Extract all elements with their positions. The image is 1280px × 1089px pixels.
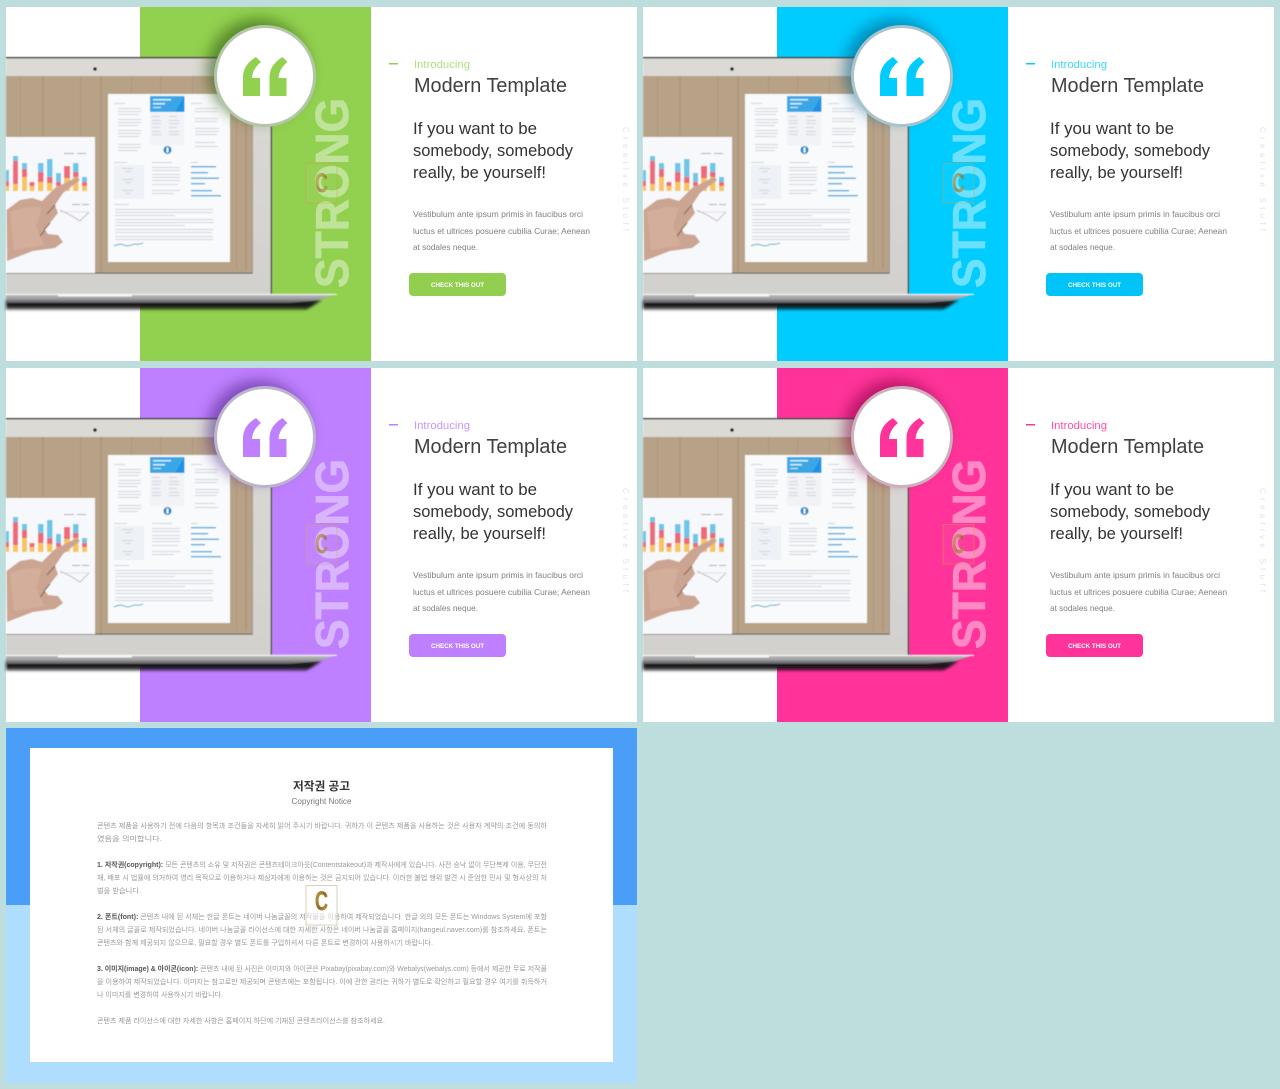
- body text: Vestibulum ante ipsum primis in faucibus orci: [1050, 570, 1220, 580]
- laptop with photo of resume and chart: [6, 57, 337, 310]
- vertical caption: Creative Stuff: [1258, 488, 1267, 593]
- watermark C: C: [315, 886, 328, 916]
- vertical word STRONG: STRONG: [943, 459, 995, 649]
- vertical word STRONG: STRONG: [306, 459, 358, 649]
- quote text: somebody, somebody: [413, 141, 573, 160]
- quote text: [1050, 119, 1210, 182]
- clause 2 font: [97, 912, 548, 947]
- vertical word STRONG: STRONG: [943, 98, 995, 288]
- quote badge: [216, 26, 314, 126]
- heading: Modern Template: [414, 436, 567, 458]
- clause 3 image and icon: [97, 964, 548, 999]
- notice subtitle: Copyright Notice: [292, 796, 352, 806]
- heading: Modern Template: [1051, 436, 1204, 458]
- accent dash: [389, 63, 398, 64]
- accent dash: [1026, 63, 1035, 64]
- quote text: really, be yourself!: [413, 524, 546, 543]
- eyebrow: Introducing: [1051, 420, 1107, 432]
- body text: [413, 209, 590, 252]
- eyebrow: Introducing: [1051, 59, 1107, 71]
- body text: [1050, 570, 1227, 613]
- button: [1046, 273, 1143, 296]
- body text: luctus et ultrices posuere cubilia Curae; Aenean: [413, 226, 590, 236]
- white notice card: [30, 748, 613, 1062]
- pink colour band: [777, 368, 1008, 722]
- quote text: really, be yourself!: [1050, 524, 1183, 543]
- clause 3 image and icon: 3. 이미지(image) & 아이콘(icon): 콘텐츠 내에 된 사진은 이미지와 아이콘은 Pixabay(pixabay.com)와 Webalys(webalys.com) 등에서 제공한 무료 저작물: [97, 964, 548, 973]
- intro paragraph: [97, 821, 548, 843]
- watermark C: C: [952, 168, 965, 198]
- upper blue band: [6, 728, 637, 905]
- accent dash: [389, 424, 398, 426]
- vertical caption: Creative Stuff: [621, 127, 630, 232]
- watermark C: C: [315, 529, 328, 559]
- green colour band: [140, 7, 371, 361]
- eyebrow: Introducing: [414, 420, 470, 432]
- body text: Vestibulum ante ipsum primis in faucibus orci: [1050, 209, 1220, 219]
- closing line: 콘텐츠 제품 라이선스에 대한 자세한 사항은 홈페이지 하단에 기재된 콘텐츠라이선스를 참조하세요.: [97, 1016, 385, 1025]
- body text: at sodales neque.: [1050, 603, 1115, 613]
- body text: [413, 570, 590, 613]
- body text: at sodales neque.: [1050, 242, 1115, 252]
- quote text: [413, 119, 573, 182]
- slide: green: [6, 7, 637, 361]
- quote badge: [216, 388, 314, 486]
- notice title: 저작권 공고: [293, 779, 350, 793]
- quote text: somebody, somebody: [1050, 502, 1210, 521]
- body text: luctus et ultrices posuere cubilia Curae; Aenean: [1050, 226, 1227, 236]
- body text: Vestibulum ante ipsum primis in faucibus orci: [413, 570, 583, 580]
- clause 3 image and icon: 나 이미지를 변경하여 사용하시기 바랍니다.: [97, 990, 223, 999]
- laptop with photo of resume and chart: [643, 57, 974, 310]
- body text: luctus et ultrices posuere cubilia Curae; Aenean: [1050, 587, 1227, 597]
- watermark C: C: [952, 529, 965, 559]
- clause 1 copyright: [97, 860, 547, 895]
- watermark C: [306, 164, 337, 203]
- button: CHECK THIS OUT: [431, 643, 484, 650]
- slide: pink: [643, 368, 1274, 722]
- quote badge: [852, 388, 952, 486]
- lower light blue band: [6, 905, 637, 1083]
- circle shadow: [844, 19, 946, 121]
- vertical caption: Creative Stuff: [621, 488, 630, 593]
- quote text: somebody, somebody: [1050, 141, 1210, 160]
- quote text: If you want to be: [413, 480, 537, 499]
- button: CHECK THIS OUT: [1068, 282, 1121, 289]
- watermark C: [306, 524, 337, 564]
- eyebrow: Introducing: [414, 59, 470, 71]
- body text: [1050, 209, 1227, 252]
- clause 2 font: 된 서체의 글꼴로 제작되었습니다. 네이버 나눔글꼴 라이선스에 대한 자세한 사항은 네이버 나눔글꼴 홈페이지(hangeul.naver.com)를 참조하세요. 폰트는: [97, 925, 548, 934]
- quote text: really, be yourself!: [413, 163, 546, 182]
- slide: copyright notice: [6, 728, 637, 1083]
- watermark C: [943, 524, 974, 564]
- body text: at sodales neque.: [413, 603, 478, 613]
- purple colour band: [140, 368, 371, 722]
- accent dash: [1026, 424, 1035, 426]
- body text: luctus et ultrices posuere cubilia Curae; Aenean: [413, 587, 590, 597]
- body text: at sodales neque.: [413, 242, 478, 252]
- clause 1 copyright: 재, 배포 시 법률에 의거하여 영리 목적으로 이용하거나 제삼자에게 이용하는 것은 금지되어 있습니다. 이러한 불법 행위 발견 시 준엄한 민사 및 형사상의 처: [97, 873, 547, 882]
- slide: purple: [6, 368, 637, 722]
- quote text: If you want to be: [1050, 119, 1174, 138]
- quote badge: [852, 26, 952, 126]
- clause 2 font: 2. 폰트(font): 콘텐츠 내에 된 서체는 한글 폰트는 네이버 나눔글꼴의 저작물을 이용하여 제작되었습니다. 한글 외의 모든 폰트는 Windows System에 포함: [97, 912, 548, 921]
- quote text: If you want to be: [1050, 480, 1174, 499]
- quote text: somebody, somebody: [413, 502, 573, 521]
- quote text: [413, 480, 573, 543]
- laptop with photo of resume and chart: [6, 418, 337, 671]
- intro paragraph: 콘텐츠 제품을 사용하기 전에 다음의 항목과 조건들을 자세히 읽어 주시기 바랍니다. 귀하가 이 콘텐츠 제품을 사용하는 것은 사용자 계약의 조건에 동의하: [97, 821, 548, 830]
- quote text: [1050, 480, 1210, 543]
- heading: Modern Template: [1051, 75, 1204, 97]
- button: CHECK THIS OUT: [1068, 643, 1121, 650]
- button: [409, 634, 506, 657]
- vertical caption: Creative Stuff: [1258, 127, 1267, 232]
- cyan colour band: [777, 7, 1008, 361]
- button: [409, 273, 506, 296]
- clause 1 copyright: 벌을 받습니다.: [97, 886, 141, 895]
- body text: Vestibulum ante ipsum primis in faucibus orci: [413, 209, 583, 219]
- watermark C: [306, 886, 337, 925]
- watermark C: [943, 164, 974, 203]
- laptop with photo of resume and chart: [643, 418, 974, 671]
- vertical word STRONG: STRONG: [306, 98, 358, 288]
- clause 3 image and icon: 을 이용하여 제작되었습니다. 이미지는 참고로만 제공되며 콘텐츠에는 포함됩니다. 이에 관한 권리는 귀하가 별도로 확인하고 필요할 경우 여기를 취득하거: [97, 977, 547, 986]
- circle shadow: [207, 380, 309, 482]
- clause 1 copyright: 1. 저작권(copyright): 모든 콘텐츠의 소유 및 저작권은 콘텐츠테이크아웃(Contentstakeout)과 제작사에게 있습니다. 사전 승낙 없이 무단복제 이용, 무단전: [97, 860, 547, 869]
- clause 2 font: 콘텐츠와 함께 제공되지 않으므로, 필요할 경우 별도 폰트를 구입하셔서 다른 폰트로 변경하여 사용하시기 바랍니다.: [97, 938, 433, 947]
- intro paragraph: 였음을 의미합니다.: [97, 834, 162, 843]
- slide: cyan: [643, 7, 1274, 361]
- quote text: If you want to be: [413, 119, 537, 138]
- watermark C: C: [315, 168, 328, 198]
- button: [1046, 634, 1143, 657]
- button: CHECK THIS OUT: [431, 282, 484, 289]
- heading: Modern Template: [414, 75, 567, 97]
- circle shadow: [844, 380, 946, 482]
- circle shadow: [207, 19, 309, 121]
- quote text: really, be yourself!: [1050, 163, 1183, 182]
